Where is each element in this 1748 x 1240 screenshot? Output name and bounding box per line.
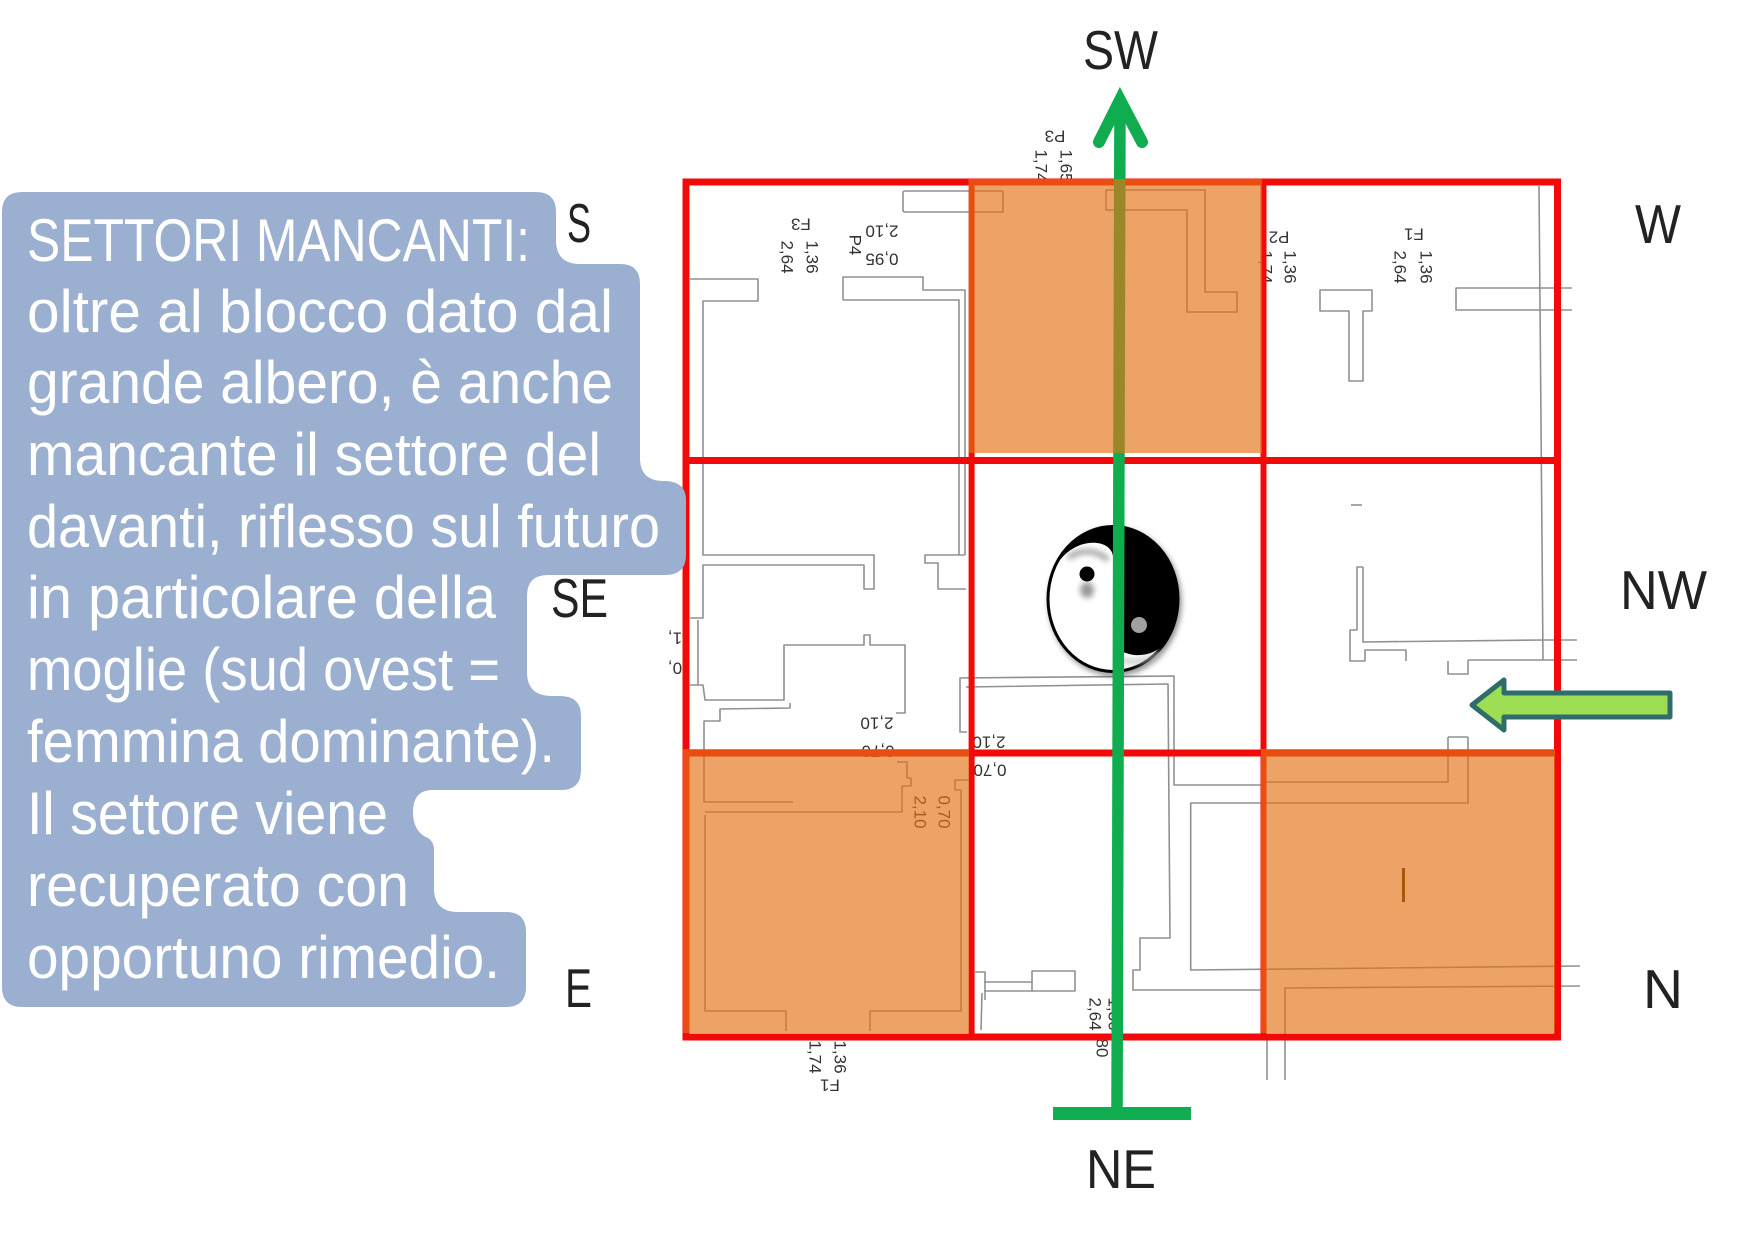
plan dimensions: P3 xyxy=(1045,126,1065,146)
plan dimensions: 1,36 xyxy=(1280,250,1300,284)
direction label: SW: SW xyxy=(1083,19,1158,81)
mark in bottom right sector xyxy=(1402,868,1405,902)
direction label: NW: NW xyxy=(1620,559,1707,621)
plan dimensions: 1,74 xyxy=(806,1040,824,1074)
callout text: oltre al blocco dato dal xyxy=(27,278,613,345)
callout: settori mancanti xyxy=(2,192,686,1007)
direction label: N: N xyxy=(1643,958,1683,1020)
missing sector: bottom left xyxy=(683,749,969,1033)
plan dimensions: F1 xyxy=(1404,224,1424,244)
callout text: opportuno rimedio. xyxy=(27,924,500,991)
plan dimensions: 2,10 xyxy=(910,795,930,829)
plan dimensions xyxy=(668,126,1436,1094)
plan dimensions: 1,36 xyxy=(830,1040,850,1074)
plan dimensions: P4 xyxy=(846,235,864,255)
plan dimensions: 1,36 xyxy=(1104,997,1124,1031)
walls: centre and bottom centre rooms xyxy=(960,660,1580,1080)
plan dimensions: 0,70 xyxy=(973,760,1007,780)
callout text: grande albero, è anche xyxy=(27,349,613,416)
callout text: femmina dominante). xyxy=(27,708,555,775)
plan dimensions: F1 xyxy=(820,1076,840,1094)
callout text: Il settore viene xyxy=(27,780,388,847)
plan dimensions: 1,74 xyxy=(1032,149,1050,183)
callout text: SETTORI MANCANTI: xyxy=(27,207,530,274)
floor plan drawing xyxy=(668,126,1580,1094)
green SW–NE axis arrow xyxy=(1053,100,1191,1120)
callout text xyxy=(27,207,660,991)
plan dimensions: 1, xyxy=(668,628,682,648)
missing sector: bottom right xyxy=(1261,749,1555,1033)
plan dimensions: 2,64 xyxy=(1086,997,1104,1031)
plan dimensions: 0, xyxy=(668,658,682,678)
direction label: W: W xyxy=(1635,193,1681,255)
callout text: in particolare della xyxy=(27,564,497,631)
plan dimensions: 2,10 xyxy=(865,222,899,240)
plan dimensions: P2 xyxy=(1269,228,1289,246)
direction label: E: E xyxy=(565,957,592,1019)
plan dimensions: 2,64 xyxy=(1390,250,1410,284)
missing sector: top centre xyxy=(968,179,1262,453)
plan dimensions: 1,65 xyxy=(1056,149,1076,183)
callout text: mancante il settore del xyxy=(27,421,601,488)
plan dimensions: 80 xyxy=(1092,1039,1112,1057)
plan dimensions: 2,64 xyxy=(778,240,796,274)
plan dimensions: 1,36 xyxy=(802,240,822,274)
plan dimensions: 0,70 xyxy=(861,742,895,760)
direction label: NE: NE xyxy=(1086,1138,1156,1200)
direction label: S: S xyxy=(567,192,591,254)
entrance arrow xyxy=(1472,680,1670,730)
red nine-sector grid xyxy=(686,182,1558,1037)
walls: right rooms xyxy=(1320,186,1577,661)
callout text: recuperato con xyxy=(27,852,409,919)
plan dimensions: 0,70 xyxy=(934,795,954,829)
callout text: moglie (sud ovest = xyxy=(27,636,500,703)
plan dimensions: 1,36 xyxy=(1416,250,1436,284)
plan dimensions: 1,74 xyxy=(1256,250,1276,284)
plan dimensions: F3 xyxy=(791,214,811,234)
icon: yin yang xyxy=(1048,526,1179,672)
direction label: SE: SE xyxy=(551,567,608,629)
plan dimensions: 0,95 xyxy=(865,250,899,268)
callout text: davanti, riflesso sul futuro xyxy=(27,493,660,560)
walls: top left room xyxy=(690,191,1003,1031)
plan dimensions: 2,10 xyxy=(860,714,894,732)
plan dimensions: 2,10 xyxy=(972,732,1006,752)
walls: top centre room xyxy=(1106,190,1237,312)
